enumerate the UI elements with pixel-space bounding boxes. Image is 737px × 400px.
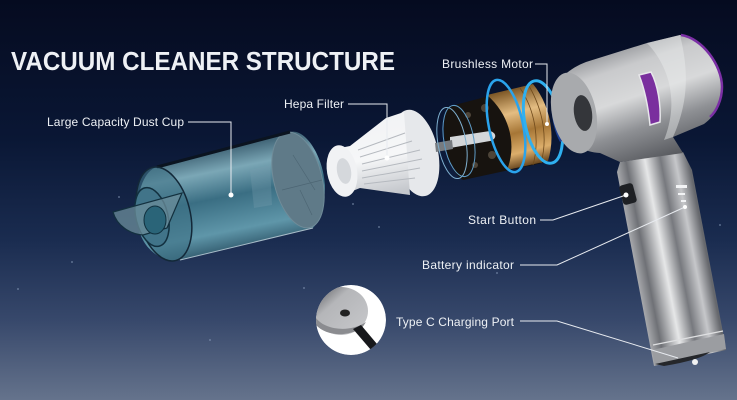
- hepa filter: [323, 105, 447, 201]
- battery lights: [676, 185, 687, 202]
- label: brushless motor: Brushless Motor: [442, 57, 533, 71]
- head: [553, 35, 722, 162]
- label: hepa filter: [284, 97, 390, 160]
- label: type c charging port: [396, 315, 698, 365]
- handle: [617, 152, 726, 366]
- title: VACUUM CLEANER STRUCTURE: [11, 48, 395, 76]
- charging port inset: [314, 285, 386, 355]
- head rim purple: [681, 35, 722, 117]
- label: battery indicator: [422, 205, 687, 272]
- label: hepa filter: Hepa Filter: [284, 97, 344, 111]
- label: large capacity dust cup: Large Capacity Dust Cup: [47, 115, 184, 129]
- label: brushless motor: [442, 57, 549, 126]
- label: large capacity dust cup: [47, 115, 234, 198]
- start button: [619, 183, 637, 205]
- handle bottom cap: [652, 334, 726, 365]
- label: start button: Start Button: [468, 213, 536, 227]
- dust cup: [113, 127, 333, 267]
- label: battery indicator: Battery indicator: [422, 258, 514, 272]
- star specks: [17, 196, 721, 341]
- brushless motor: [432, 76, 586, 181]
- vent: [639, 72, 660, 125]
- rear band: [647, 35, 686, 140]
- label: start button: [468, 192, 628, 227]
- head front face: [544, 68, 604, 158]
- label: type c charging port: Type C Charging Port: [396, 315, 515, 329]
- vacuum body: [544, 35, 726, 366]
- labels and leader lines: [47, 57, 698, 365]
